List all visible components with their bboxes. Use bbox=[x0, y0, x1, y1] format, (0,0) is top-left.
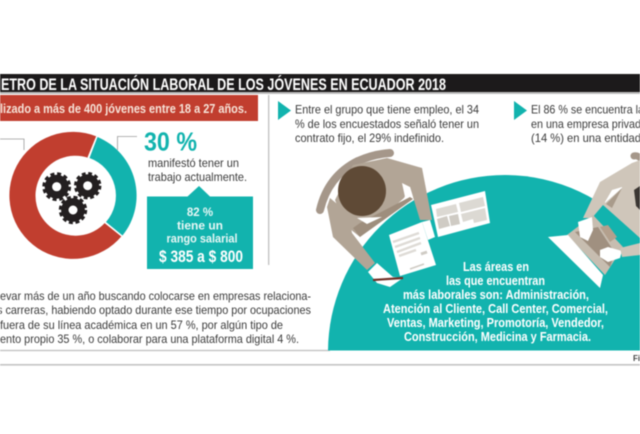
note: employment contract: Entre el grupo que tiene empleo, el 34 bbox=[295, 102, 479, 116]
note: employment contract: contrato fijo, el 29% indefinido. bbox=[295, 131, 444, 145]
salary callout: 82 % bbox=[187, 207, 213, 219]
logo bbox=[634, 186, 640, 210]
stat: 30 percent bbox=[144, 126, 247, 184]
text: labour areas: más laborales son: Administración, bbox=[403, 288, 589, 302]
paragraph: job search: fuera de su línea académica en un 57 %, por algún tipo de bbox=[0, 318, 283, 332]
text: labour areas: las que encuentran bbox=[446, 274, 545, 288]
left hand bbox=[368, 263, 403, 287]
stat: 30 percent: 30 % bbox=[144, 126, 197, 156]
head bbox=[338, 166, 386, 216]
icon: gears bbox=[44, 174, 100, 222]
stat: 30 percent: manifestó tener un bbox=[148, 156, 239, 170]
laptop bbox=[567, 215, 623, 275]
text: labour areas: Las áreas en bbox=[463, 260, 529, 274]
text: labour areas: Ventas, Marketing, Promotoría, Vendedor, bbox=[387, 316, 604, 330]
sleeve bbox=[620, 243, 640, 257]
leader line right bbox=[118, 136, 137, 150]
arm bbox=[327, 198, 375, 270]
illustration: right person bbox=[548, 156, 640, 288]
note: private company bbox=[514, 101, 640, 145]
right hand bbox=[422, 220, 435, 240]
text: labour areas: Construcción, Medicina y Farmacia. bbox=[404, 330, 591, 344]
salary callout: tiene un bbox=[177, 218, 223, 232]
pen bbox=[373, 278, 403, 280]
red banner bbox=[0, 95, 258, 121]
paragraph: job search bbox=[0, 289, 311, 346]
chair bbox=[634, 156, 640, 159]
text: labour areas bbox=[383, 260, 608, 344]
chair back bbox=[320, 153, 390, 210]
hands bbox=[578, 217, 593, 241]
source label: Fi bbox=[633, 354, 640, 363]
paper left bbox=[389, 222, 436, 276]
torso bbox=[335, 158, 432, 237]
collar bbox=[357, 217, 382, 224]
note: employment contract: % de los encuestados señaló tener un bbox=[295, 117, 479, 131]
torso bbox=[583, 160, 640, 238]
teal table bbox=[328, 175, 640, 350]
illustration: left person bbox=[320, 153, 435, 287]
leader line left bbox=[0, 139, 24, 150]
title bar: ETRO DE LA SITUACIÓN LABORAL DE LOS JÓVENES EN ECUADOR 2018 bbox=[1, 75, 446, 94]
paragraph: job search: s carreras, habiendo optado durante ese tiempo por ocupaciones bbox=[0, 303, 311, 317]
stat: 30 percent: trabajo actualmente. bbox=[148, 170, 247, 184]
illustration: papers bbox=[389, 191, 490, 276]
text: labour areas: Atención al Cliente, Call Center, Comercial, bbox=[383, 302, 608, 316]
donut chart bbox=[9, 132, 137, 259]
paragraph: job search: ento propio 35 %, o colaborar para una plataforma digital 4 %. bbox=[0, 332, 299, 346]
salary callout bbox=[147, 186, 253, 269]
paragraph: job search: evar más de un año buscando colocarse en empresas relaciona- bbox=[0, 289, 311, 303]
paper right bbox=[431, 191, 490, 237]
note: employment contract bbox=[278, 101, 479, 145]
salary callout: $ 385 a $ 800 bbox=[159, 247, 243, 266]
red banner: lizado a más de 400 jóvenes entre 18 a 27 años. bbox=[0, 102, 247, 116]
salary callout: rango salarial bbox=[166, 232, 238, 246]
